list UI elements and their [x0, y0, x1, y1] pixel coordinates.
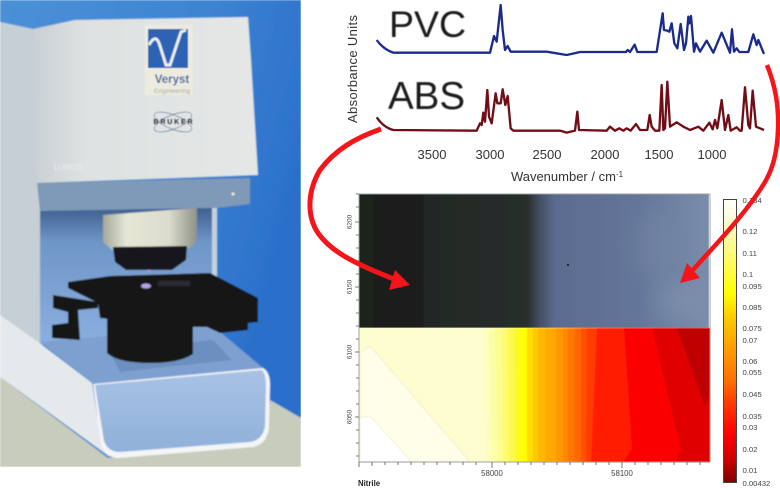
colour scale: 0.00432: [742, 479, 770, 488]
y axis tick labels: 6100: [346, 344, 354, 359]
y axis tick labels: 6050: [346, 409, 354, 424]
x axis tick labels: 1500: [645, 147, 673, 162]
stage handle: [52, 295, 98, 340]
y axis title: Absorbance Units: [345, 14, 360, 123]
x axis tick labels: 1000: [698, 147, 726, 162]
x axis tick labels: [481, 469, 634, 478]
ABS label: ABS: [388, 75, 465, 118]
colour scale: 0.06: [742, 357, 757, 366]
laser spot: [141, 284, 151, 288]
colour scale: 0.134: [742, 196, 762, 205]
indicator light: [232, 192, 234, 196]
colour scale: 0.035: [742, 412, 762, 421]
colour scale: 0.07: [742, 336, 757, 345]
logo: Veryst Engineering: [145, 25, 193, 95]
instrument head: [33, 17, 258, 183]
colour scale: 0.1: [742, 270, 753, 279]
y axis tick labels: 6150: [346, 279, 354, 294]
column interior: [40, 208, 216, 345]
x axis tick labels: 58100: [611, 469, 634, 478]
head lower strip: [37, 178, 250, 211]
colour scale: 0.01: [742, 466, 757, 475]
base top: [40, 326, 263, 385]
plot frame and ticks: [355, 194, 710, 468]
photo: microscope instrument: [0, 0, 301, 467]
contour map panel: [346, 194, 770, 488]
contour bands: [359, 328, 710, 462]
colour scale: 0.02: [742, 445, 757, 454]
colour scale: 0.075: [742, 324, 762, 333]
colour scale: 0.045: [742, 390, 762, 399]
colour scale: 0.095: [742, 282, 762, 291]
PVC spectrum: [377, 5, 764, 55]
y axis tick labels: [346, 214, 354, 424]
PVC label: PVC: [389, 3, 466, 45]
base front: [93, 368, 270, 458]
ABS spectrum: [377, 82, 764, 133]
sample stage: [68, 273, 258, 333]
microscope image: [359, 194, 709, 328]
logo: Bruker: BRUKER: [154, 119, 192, 126]
y axis tick labels: 6200: [346, 214, 354, 229]
model label: LUMOS: [54, 163, 82, 172]
logo: Veryst Engineering: Engineering: [154, 88, 190, 95]
logo: Veryst Engineering: Veryst: [155, 74, 189, 86]
lower objective: [107, 316, 193, 363]
colour scale: 0.055: [742, 368, 762, 377]
upper objective: [103, 208, 197, 250]
colour scale: [724, 196, 770, 488]
colour scale: 0.11: [742, 249, 757, 258]
x axis tick labels: 3500: [418, 147, 446, 162]
dark objective: [113, 246, 187, 270]
colour scale: 0.085: [742, 303, 762, 312]
x axis title: -1: [616, 170, 624, 179]
Nitrile label: Nitrile: [358, 479, 381, 488]
colour scale: 0.03: [742, 423, 757, 432]
right post: [212, 208, 217, 278]
x axis tick labels: 3000: [476, 147, 504, 162]
base side: [0, 315, 110, 457]
logo: Bruker: [153, 111, 193, 133]
x axis tick labels: [418, 147, 726, 162]
spectra panel: [345, 3, 764, 184]
colour scale: 0.12: [742, 227, 757, 236]
x axis tick labels: 2000: [591, 147, 619, 162]
table surface: [0, 377, 301, 467]
arrow: ABS spectrum to dark region: [310, 129, 410, 290]
x axis tick labels: 2500: [533, 147, 561, 162]
arrow: PVC spectrum to light region: [680, 65, 778, 283]
left column: [0, 22, 40, 345]
x axis tick labels: 58000: [481, 469, 504, 478]
x axis title: Wavenumber / cm: [511, 169, 616, 184]
